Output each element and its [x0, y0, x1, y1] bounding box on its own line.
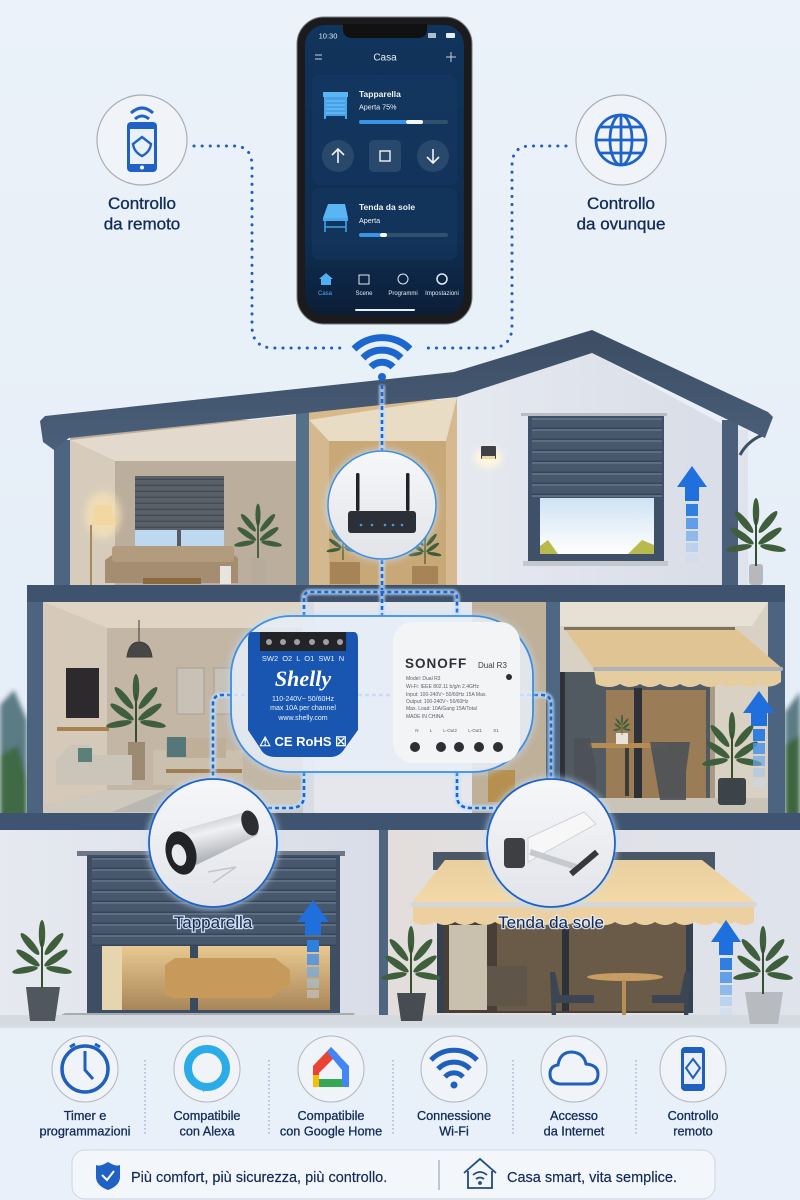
feature: Internet access: da Internet: [544, 1124, 605, 1138]
icon: smart home: [464, 1159, 496, 1188]
arrow upper window: [677, 466, 707, 562]
right control label: da ovunque: [577, 214, 665, 234]
awning upper: [564, 627, 783, 687]
module panel: [231, 616, 533, 772]
wifi symbol: [354, 338, 410, 381]
floor beam: [0, 813, 800, 830]
house: ground floor: [0, 830, 800, 1038]
house: middle floor: [27, 602, 785, 814]
arrow lower awning: [711, 920, 741, 1016]
card: Tenda da sole: Aperta: [359, 216, 380, 225]
icon: awning actuator: [504, 812, 597, 874]
feature: Alexa: con Alexa: [179, 1124, 235, 1138]
left upper room: [70, 415, 296, 586]
icon: remote phone: [127, 108, 157, 172]
roof: [40, 330, 773, 450]
feature: Google Home: Compatibile: [298, 1109, 364, 1123]
bottom banner: [72, 1150, 715, 1199]
feature: Alexa: Compatibile: [174, 1109, 240, 1123]
right control circle: [576, 95, 666, 185]
wall lamp: [474, 446, 502, 468]
feature icons row: [40, 1036, 726, 1138]
feature: Wi-Fi: [417, 1036, 491, 1138]
actuator circle: [485, 777, 617, 909]
label: Tenda da sole: Tenda da sole: [498, 913, 604, 932]
card: Tapparella: [312, 75, 457, 185]
arrows: open direction: [297, 466, 775, 1016]
card: Tenda da sole: Tenda da sole: [359, 202, 415, 212]
Sonoff module: [393, 622, 520, 763]
feature: timer: [40, 1036, 130, 1138]
Sonoff module: SONOFF: [405, 656, 467, 671]
app navigation: [318, 273, 459, 311]
label: Tapparella: Tapparella: [174, 913, 253, 932]
app navigation: Programmi: [388, 291, 418, 297]
mid floor beam: [27, 585, 785, 602]
left control label: da remoto: [104, 214, 180, 234]
Shelly module: max 10A per channel: [270, 705, 336, 712]
bottom banner: Più comfort, più sicurezza, più controllo.: [131, 1170, 387, 1186]
columns: [54, 440, 70, 586]
motor circle: [147, 777, 279, 909]
Sonoff module: N L L-Out2 L-Out1 S1: [415, 728, 499, 733]
left control circle: [97, 95, 187, 185]
terrace room: [560, 602, 768, 814]
feature: remote control: [660, 1036, 726, 1138]
router circle: [326, 449, 438, 561]
Sonoff module: Output: 100-240V~ 50/60Hz: [406, 699, 469, 705]
smartphone app: [297, 17, 472, 324]
feature: Wi-Fi: Connessione: [417, 1109, 491, 1123]
Sonoff module: Max. Load: 10A/Gang 15A/Total: [406, 706, 477, 712]
Shelly module: ⚠ CE RoHS ☒: [259, 734, 347, 749]
Sonoff module: Model: Dual R3: [406, 676, 441, 682]
middle upper room: [309, 397, 457, 586]
feature: Alexa: [174, 1036, 240, 1138]
Sonoff module: Input: 100-240V~ 50/60Hz 15A Max.: [406, 692, 487, 698]
left control label: Controllo: [108, 194, 176, 213]
icon: tubular motor: [161, 808, 262, 883]
arrow garage shutter: [297, 900, 329, 998]
feature: remote control: remoto: [673, 1124, 713, 1138]
app header: Casa: [373, 52, 397, 64]
icon: router: [348, 473, 416, 533]
gable wall: [457, 353, 722, 586]
wifi and cloud connection lines: [194, 146, 566, 348]
Shelly module: Shelly: [275, 666, 331, 691]
lower awning window: [437, 921, 693, 1022]
ground plants: [12, 920, 793, 1024]
Shelly module: www.shelly.com: [277, 715, 328, 722]
center room: [303, 602, 546, 814]
icon: shield: [96, 1162, 120, 1190]
feature: Internet access: Accesso: [550, 1109, 598, 1123]
pavement: [0, 1015, 800, 1028]
trees behind the house: [0, 690, 800, 830]
Sonoff module: Dual R3: [478, 661, 507, 670]
bottom banner: Casa smart, vita semplice.: [507, 1170, 677, 1186]
columns: [27, 602, 43, 814]
right control label: Controllo: [587, 194, 655, 213]
Shelly module: [248, 632, 358, 757]
Shelly module: SW2 O2 L O1 SW1 N: [262, 654, 344, 663]
living room: [43, 602, 303, 814]
feature: timer: Timer e: [64, 1109, 106, 1123]
feature: Wi-Fi: Wi-Fi: [439, 1124, 469, 1138]
wiring lines: [213, 385, 551, 808]
app navigation: Impostazioni: [425, 291, 459, 297]
app navigation: Scene: [355, 291, 373, 297]
gutter: [740, 434, 765, 455]
icon: globe: [596, 115, 646, 165]
garage shutter and window: [77, 851, 345, 1015]
lower awning: [411, 852, 757, 925]
Shelly module: 110-240V~ 50/60Hz: [272, 696, 334, 703]
card: Tapparella: Tapparella: [359, 89, 401, 99]
feature: Internet access: [541, 1036, 607, 1138]
feature: Google Home: [280, 1036, 382, 1138]
card: Tapparella: Aperta 75%: [359, 102, 397, 112]
Sonoff module: MADE IN CHINA: [406, 714, 444, 720]
app navigation: Casa: [318, 291, 333, 297]
feature: timer: programmazioni: [40, 1124, 130, 1138]
upper window: [521, 413, 668, 566]
Sonoff module: Wi-Fi: IEEE 802.11 b/g/n 2.4GHz: [406, 684, 479, 690]
arrow terrace awning: [743, 691, 775, 787]
feature: Google Home: con Google Home: [280, 1124, 382, 1138]
card: Tenda da sole: [312, 188, 457, 260]
house: upper floor: [54, 353, 786, 586]
side plant: [726, 498, 786, 585]
feature: remote control: Controllo: [668, 1109, 718, 1123]
entrance step: [48, 1013, 355, 1026]
smartphone app: 10:30: [319, 32, 337, 40]
